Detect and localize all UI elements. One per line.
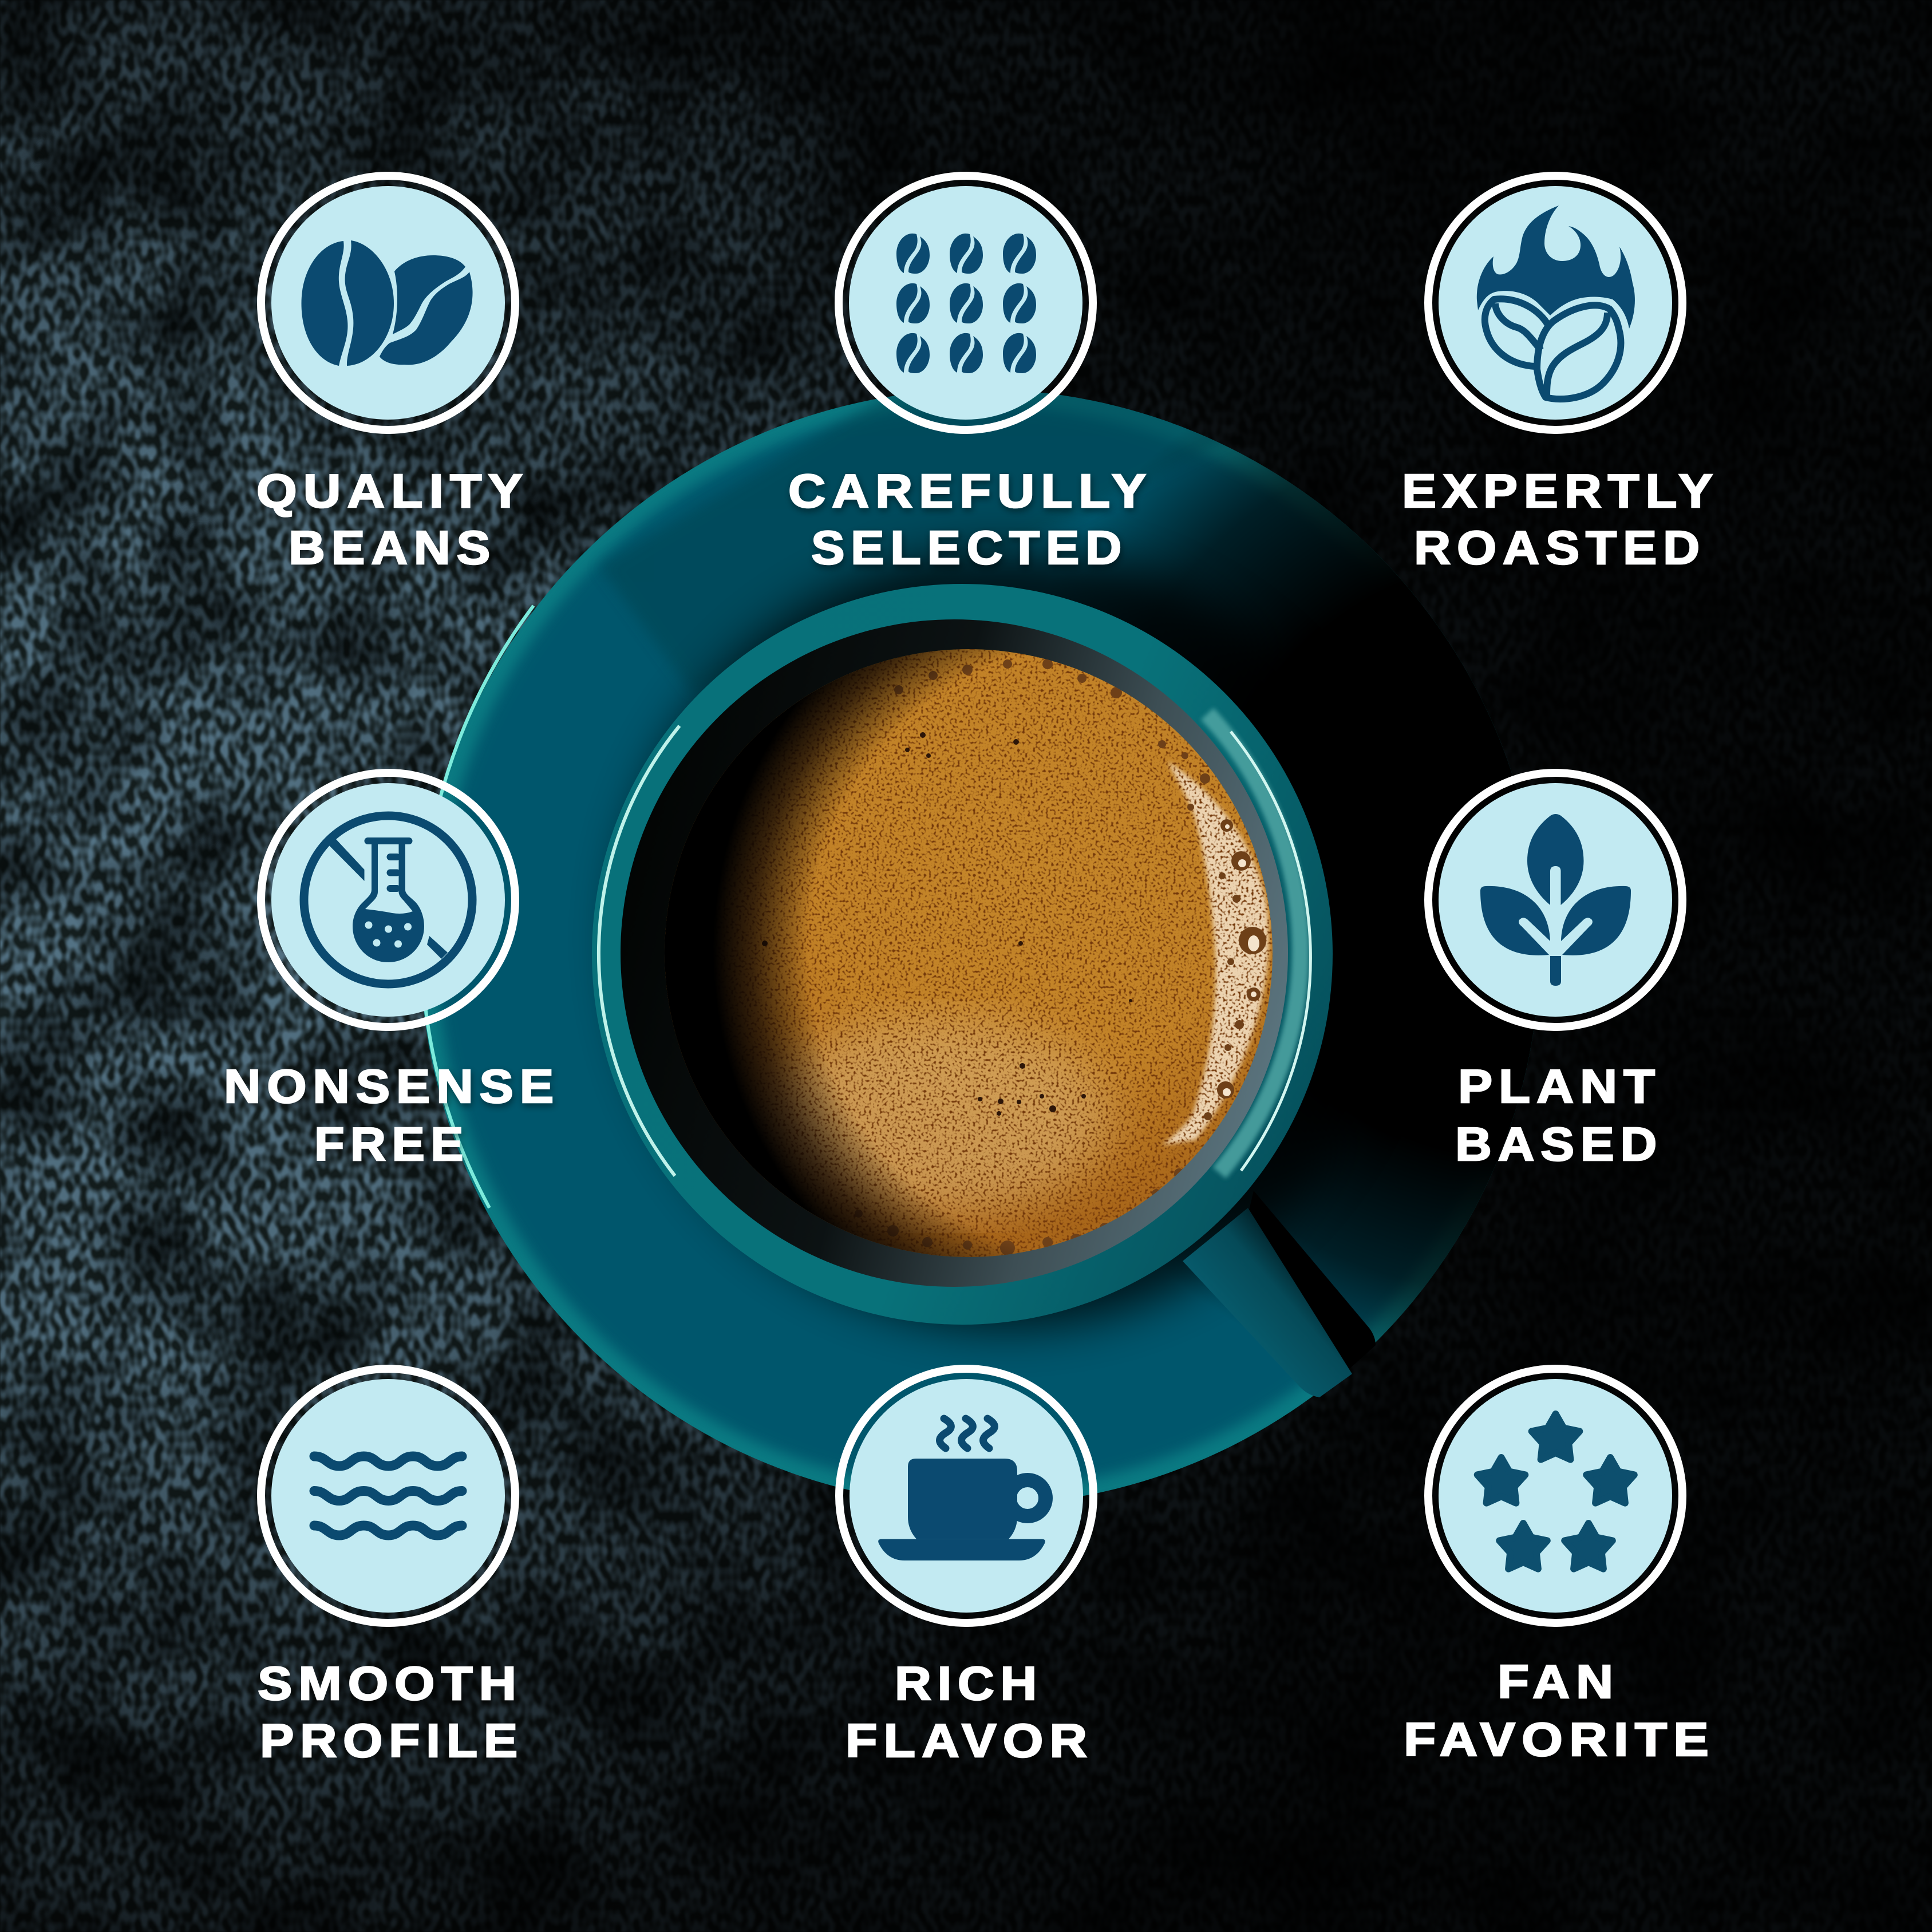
label: SMOOTH: [258, 1657, 523, 1710]
label: SELECTED: [811, 521, 1128, 574]
coffee crema: [665, 649, 1273, 1257]
badge: [1428, 773, 1682, 1027]
panel: plant based: [1428, 773, 1682, 1171]
saucer: [424, 393, 1536, 1496]
label: BASED: [1455, 1117, 1663, 1171]
label: ROASTED: [1414, 521, 1706, 574]
label: PLANT: [1458, 1060, 1661, 1113]
label: [1402, 464, 1719, 574]
label: QUALITY: [256, 464, 529, 517]
badge: [1428, 1369, 1682, 1623]
icon: prohibited flask: [304, 816, 472, 984]
icon: nine beans: [896, 234, 1036, 373]
icon: flame over beans: [1477, 206, 1635, 399]
label: [256, 464, 529, 574]
label: FREE: [314, 1117, 469, 1171]
icon: waves: [314, 1456, 462, 1535]
panel: fan favorite: [1404, 1369, 1715, 1766]
badge: [261, 1369, 515, 1623]
label: [224, 1060, 560, 1171]
dark espresso specks: [762, 732, 1132, 1116]
icon: coffee beans: [301, 240, 473, 366]
badge: [261, 176, 515, 430]
label: FLAVOR: [846, 1714, 1093, 1767]
label: FAVORITE: [1404, 1713, 1715, 1766]
badge: [1428, 176, 1682, 430]
label: [1455, 1060, 1663, 1171]
label: [788, 464, 1152, 574]
panel: rich flavor: [839, 1369, 1093, 1767]
badge: [839, 176, 1093, 430]
panel: smooth profile: [258, 1369, 524, 1767]
label: PROFILE: [260, 1714, 524, 1767]
label: CAREFULLY: [788, 464, 1152, 517]
label: EXPERTLY: [1402, 464, 1719, 517]
label: RICH: [895, 1657, 1043, 1710]
label: BEANS: [289, 521, 496, 574]
label: [1404, 1655, 1715, 1766]
panel: expertly roasted: [1402, 176, 1719, 574]
panel: carefully selected: [788, 176, 1152, 574]
coffee cup: [592, 584, 1333, 1325]
label: NONSENSE: [224, 1060, 560, 1113]
label: FAN: [1498, 1655, 1619, 1708]
icon: five stars: [1477, 1414, 1634, 1569]
icon: steaming cup: [878, 1419, 1045, 1560]
label: [846, 1657, 1093, 1767]
icon: plant: [1480, 814, 1631, 986]
badge: [839, 1369, 1093, 1623]
crema foam crescent: [1162, 761, 1269, 1145]
label: [258, 1657, 524, 1767]
cup handle: [1183, 1191, 1376, 1398]
panel: quality beans: [256, 176, 529, 574]
panel: nonsense free: [224, 773, 560, 1171]
badge: [261, 773, 515, 1027]
